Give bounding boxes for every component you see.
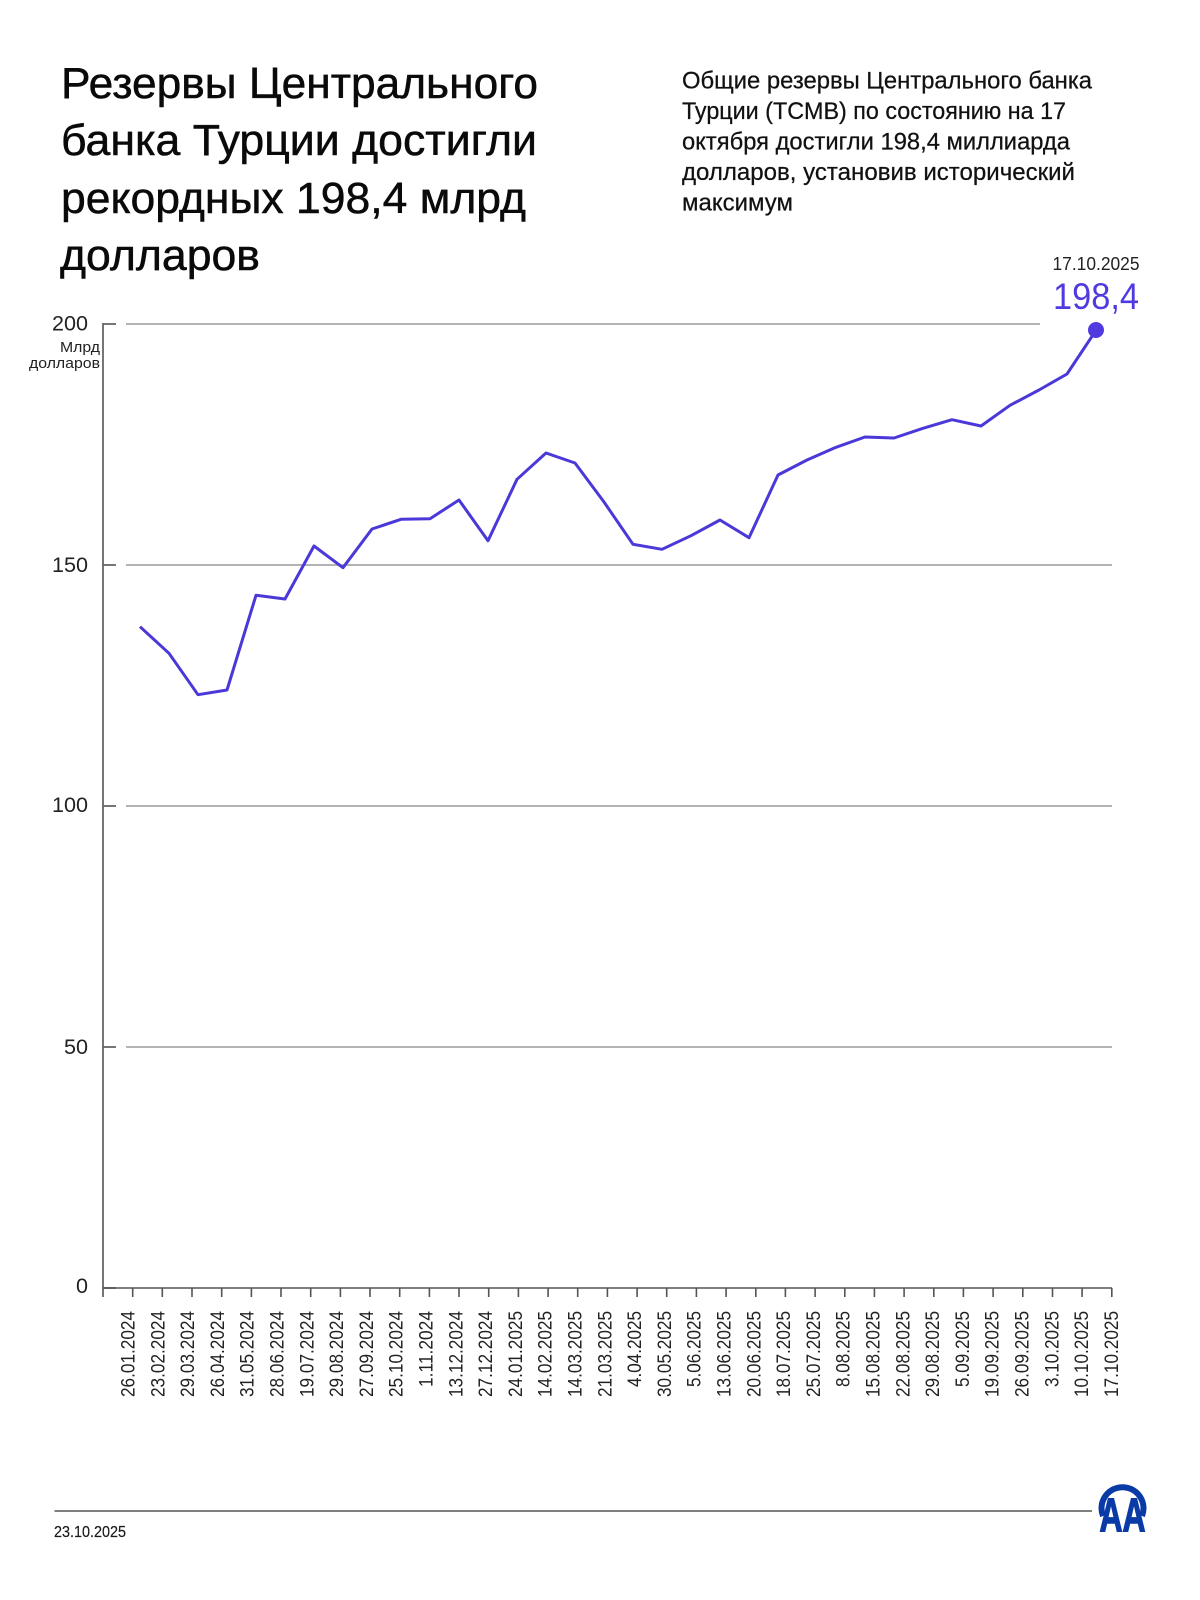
title: долларов (60, 231, 260, 280)
y axis (103, 323, 116, 1297)
y axis labels: 50 (64, 1036, 88, 1059)
x axis date labels: 3.10.2025 (1042, 1311, 1063, 1387)
x axis date labels: 13.06.2025 (714, 1311, 736, 1397)
line chart (29, 254, 1140, 1397)
icon: AA logo: AA (1100, 1488, 1146, 1542)
x axis date labels: 26.04.2024 (208, 1311, 229, 1397)
x axis date labels: 5.09.2025 (953, 1311, 974, 1387)
icon: AA logo (1100, 1487, 1146, 1542)
x axis date labels: 10.10.2025 (1072, 1311, 1093, 1397)
description text: октября достигли 198,4 миллиарда (682, 128, 1071, 156)
x axis with ticks (103, 1288, 1112, 1297)
x axis date labels: 29.03.2024 (178, 1311, 199, 1397)
x axis date labels: 19.09.2025 (983, 1311, 1004, 1397)
description text (682, 68, 1093, 216)
x axis date labels: 19.07.2024 (297, 1311, 318, 1397)
x axis date labels: 25.10.2024 (387, 1311, 408, 1397)
x axis date labels: 4.04.2025 (625, 1311, 646, 1387)
x axis date labels: 27.09.2024 (357, 1311, 378, 1397)
y axis labels: 0 (76, 1275, 88, 1298)
title (60, 59, 538, 280)
description text: Общие резервы Центрального банка (682, 68, 1093, 94)
description text: Турции (TCMB) по состоянию на 17 (682, 98, 1066, 125)
y axis labels (52, 312, 88, 1298)
x axis date labels: 29.08.2024 (327, 1311, 348, 1397)
x axis date labels: 25.07.2025 (804, 1311, 825, 1397)
latest value label: 198,4 (1053, 276, 1139, 317)
y axis unit: Млрд (60, 339, 100, 356)
footer date: 23.10.2025 (54, 1524, 126, 1541)
latest date label: 17.10.2025 (1052, 254, 1140, 274)
x axis date labels: 18.07.2025 (774, 1311, 795, 1397)
x axis date labels: 28.06.2024 (268, 1311, 288, 1397)
y axis unit: долларов (29, 355, 100, 372)
x axis date labels: 24.01.2025 (506, 1311, 527, 1397)
title: банка Турции достигли (61, 116, 537, 165)
x axis date labels: 26.09.2025 (1012, 1311, 1034, 1397)
x axis date labels: 31.05.2024 (238, 1311, 259, 1397)
x axis date labels: 15.08.2025 (864, 1311, 884, 1397)
x axis date labels: 8.08.2025 (834, 1311, 855, 1387)
x axis date labels: 26.01.2024 (118, 1311, 140, 1397)
x axis date labels: 30.05.2025 (655, 1311, 676, 1397)
x axis date labels (118, 1311, 1123, 1397)
x axis date labels: 1.11.2024 (416, 1311, 438, 1387)
description text: максимум (682, 190, 793, 216)
x axis date labels: 17.10.2025 (1102, 1311, 1123, 1397)
x axis date labels: 5.06.2025 (685, 1311, 706, 1387)
y axis labels: 100 (52, 794, 88, 817)
x axis date labels: 27.12.2024 (476, 1311, 497, 1397)
y axis unit (29, 339, 100, 372)
x axis date labels: 20.06.2025 (744, 1311, 765, 1397)
footer rule (54, 1510, 1092, 1512)
x axis date labels: 14.03.2025 (566, 1311, 586, 1397)
x axis date labels: 13.12.2024 (446, 1311, 467, 1397)
latest value marker (1088, 322, 1104, 338)
x axis date labels: 21.03.2025 (595, 1311, 616, 1397)
y axis labels: 200 (52, 312, 88, 336)
x axis date labels: 14.02.2025 (536, 1311, 557, 1397)
title: рекордных 198,4 млрд (61, 174, 526, 223)
x axis date labels: 22.08.2025 (893, 1311, 914, 1397)
y axis labels: 150 (52, 554, 88, 577)
x axis date labels: 23.02.2024 (148, 1311, 169, 1397)
title: Резервы Центрального (61, 59, 538, 108)
reserves data line (140, 330, 1096, 695)
gridlines (126, 324, 1112, 1047)
x axis date labels: 29.08.2025 (923, 1311, 944, 1397)
description text: долларов, установив исторический (682, 159, 1075, 186)
